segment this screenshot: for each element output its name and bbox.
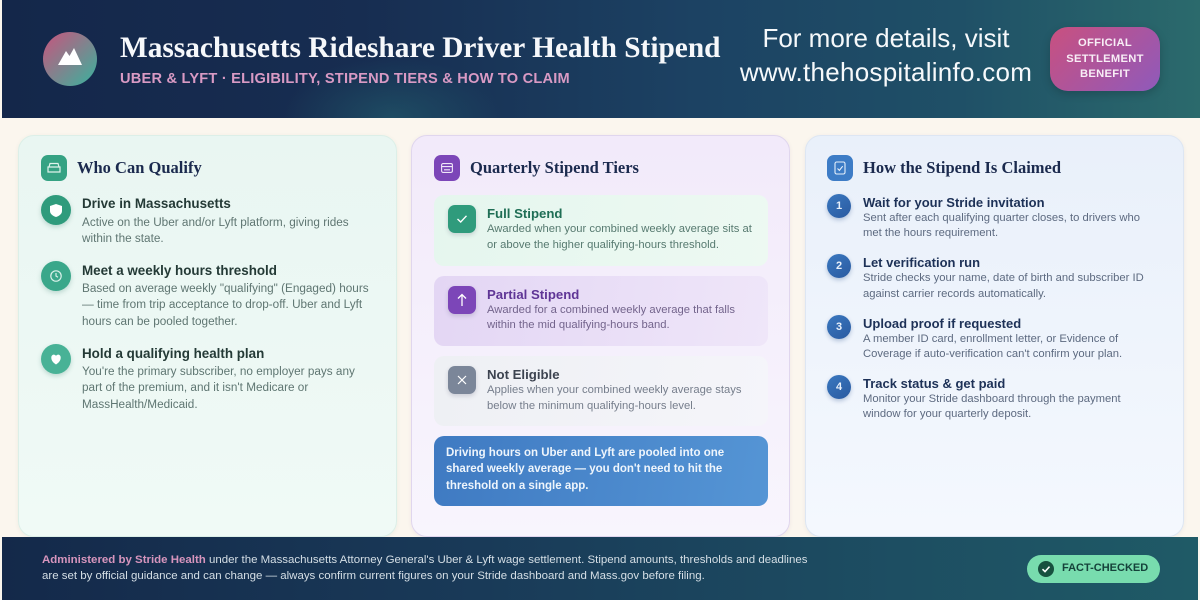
text: partial stipend [487, 287, 735, 331]
step 3: Coverage if auto-verification can't confirm your plan. [863, 348, 1122, 360]
text: full stipend [487, 206, 752, 251]
badge label: FACT-CHECKED [1062, 562, 1148, 574]
step 1 badge: 1 [836, 200, 842, 212]
step 4 badge [827, 375, 851, 399]
step 4: window for your quarterly deposit. [863, 408, 1031, 420]
website callout: For more details, visit [762, 23, 1010, 53]
step 2: Let verification run [863, 255, 980, 270]
text: not eligible [487, 367, 742, 412]
icon: heart shield [41, 344, 71, 374]
logo badge [43, 32, 97, 86]
item: drive in massachusetts: within the state. [82, 232, 164, 245]
tier: not eligible [434, 356, 768, 426]
step 3 badge [827, 315, 851, 339]
official settlement badge [1050, 27, 1160, 91]
icon: mountains [58, 48, 82, 65]
step 2: against carrier records automatically. [863, 288, 1046, 300]
callout: pooled hours: threshold on a single app. [446, 480, 588, 492]
item: health plan: You're the primary subscriber, no employer pays any [82, 365, 355, 378]
text: not eligible: Not Eligible [487, 367, 560, 382]
callout: pooled hours: Driving hours on Uber and Lyft are pooled into one [446, 446, 724, 458]
text: partial stipend: within the mid qualifying-hours band. [487, 319, 670, 331]
text: full stipend: or above the higher qualifying-hours threshold. [487, 239, 719, 251]
tier: full stipend [434, 195, 768, 266]
text: partial stipend: Partial Stipend [487, 287, 579, 302]
icon: check [448, 205, 476, 233]
icon: cross [448, 366, 476, 394]
step 3: A member ID card, enrollment letter, or Evidence of [863, 333, 1118, 345]
title: Massachusetts Rideshare Driver Health Stipend [120, 32, 720, 64]
item: weekly hours: Based on average weekly "qualifying" (Engaged) hours [82, 282, 369, 295]
item: health plan [82, 346, 355, 411]
official settlement badge: SETTLEMENT [1066, 52, 1144, 64]
website callout: www.thehospitalinfo.com [740, 57, 1032, 87]
step 2 badge [827, 254, 851, 278]
text: not eligible: below the minimum qualifying-hours level. [487, 400, 696, 412]
step 2: Stride checks your name, date of birth and subscriber ID [863, 272, 1144, 284]
heading: who can qualify: Who Can Qualify [77, 158, 202, 177]
icon: card [434, 155, 460, 181]
step 1 badge [827, 194, 851, 218]
footer note: are set by official guidance and can change — always confirm current figures on your Stride dashboard and Mass.gov before filing. [42, 570, 705, 582]
subtitle: UBER & LYFT · ELIGIBILITY, STIPEND TIERS & HOW TO CLAIM [120, 71, 570, 87]
header banner [2, 0, 1200, 118]
item: weekly hours: — time from trip acceptance to drop-off. Uber and Lyft [82, 298, 362, 311]
step 1: Wait for your Stride invitation [863, 195, 1045, 210]
heading: tiers: Quarterly Stipend Tiers [470, 158, 639, 177]
text: not eligible: Applies when your combined weekly average stays [487, 384, 742, 396]
step 1 [863, 195, 1140, 239]
step 2 badge: 2 [836, 260, 842, 272]
item: drive in massachusetts: Active on the Uber and/or Lyft platform, giving rides [82, 216, 349, 229]
footer bar [2, 537, 1198, 600]
text: full stipend: Full Stipend [487, 206, 562, 221]
icon: car [41, 155, 67, 181]
text: partial stipend: Awarded for a combined weekly average that falls [487, 304, 735, 316]
icon: shield [41, 195, 71, 225]
item: drive in massachusetts [82, 196, 349, 245]
footer note: Administered by Stride Health under the Massachusetts Attorney General's Uber & Lyft wage settlement. Stipend amounts, thresholds and deadlines [42, 554, 807, 566]
icon: clock [41, 261, 71, 291]
step 4: Track status & get paid [863, 376, 1005, 391]
callout: pooled hours [434, 436, 768, 506]
official settlement badge: BENEFIT [1080, 68, 1130, 80]
step 2 [863, 255, 1144, 300]
website callout [740, 23, 1032, 87]
step 1: met the hours requirement. [863, 227, 998, 239]
step 3 [863, 316, 1122, 360]
heading: how claimed: How the Stipend Is Claimed [863, 158, 1061, 177]
panel: who can qualify [18, 135, 397, 537]
step 4 [863, 376, 1121, 420]
panel: stipend tiers [411, 135, 790, 537]
item: weekly hours: Meet a weekly hours threshold [82, 263, 277, 278]
panel: how claimed [805, 135, 1184, 537]
icon: check circle [1038, 561, 1054, 577]
fact-checked badge [1027, 555, 1160, 583]
step 3 badge: 3 [836, 321, 842, 333]
icon: up arrow [448, 286, 476, 314]
item: weekly hours [82, 263, 369, 328]
item: weekly hours: hours can be pooled together. [82, 315, 237, 328]
item: drive in massachusetts: Drive in Massachusetts [82, 196, 231, 211]
step 3: Upload proof if requested [863, 316, 1021, 331]
footer note [42, 554, 808, 582]
callout: pooled hours: shared weekly average — you don't need to hit the [446, 463, 722, 475]
icon: clipboard [827, 155, 853, 181]
item: health plan: Hold a qualifying health plan [82, 346, 264, 361]
item: health plan: MassHealth/Medicaid. [82, 398, 198, 411]
text: full stipend: Awarded when your combined weekly average sits at [487, 223, 752, 235]
tier: partial stipend [434, 276, 768, 346]
step 1: Sent after each qualifying quarter closes, to drivers who [863, 212, 1140, 224]
step 4: Monitor your Stride dashboard through the payment [863, 393, 1121, 405]
item: health plan: part of the premium, and it isn't Medicare or [82, 381, 308, 394]
step 4 badge: 4 [836, 381, 842, 393]
official settlement badge: OFFICIAL [1078, 37, 1132, 49]
